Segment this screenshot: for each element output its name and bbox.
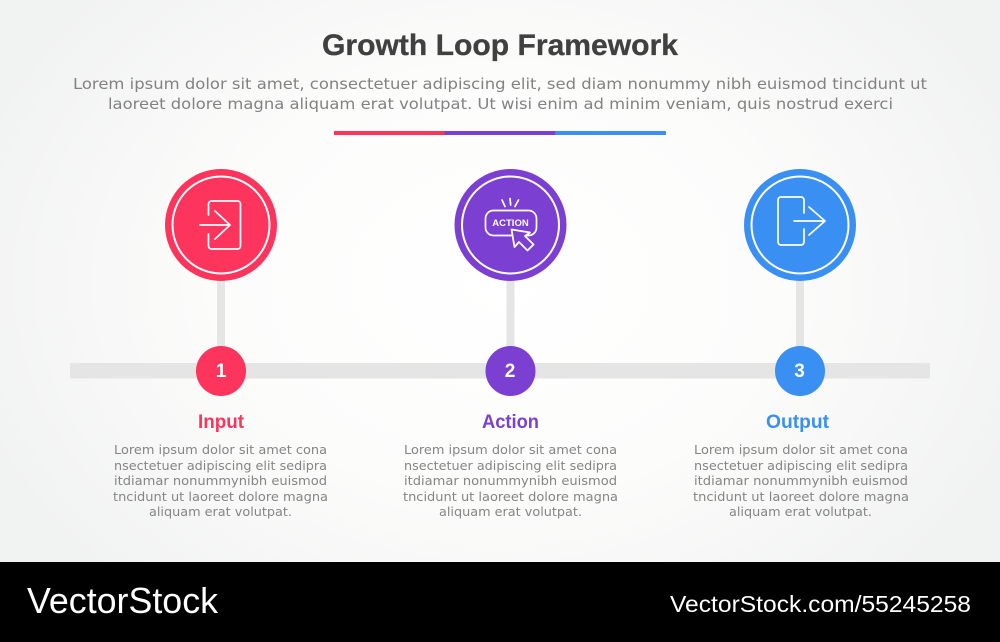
heading: Output: Output (766, 411, 829, 433)
timeline track with stems (70, 280, 930, 378)
panel: step 2 action (403, 169, 618, 519)
description text: tncidunt ut laoreet dolore magna (693, 490, 909, 504)
description text: aliquam erat volutpat. (729, 505, 872, 519)
icon: action button with cursor badge: ACTION (492, 218, 529, 229)
description text: Lorem ipsum dolor sit amet cona (404, 443, 617, 457)
description text (693, 443, 909, 519)
panel: step 3 output (693, 169, 909, 519)
description text: itdiamar nonummynibh euismod (404, 474, 617, 488)
description text: aliquam erat volutpat. (439, 505, 582, 519)
description text: Lorem ipsum dolor sit amet cona (694, 443, 908, 457)
description text (113, 443, 328, 519)
title: Growth Loop Framework (322, 29, 678, 62)
number badge 3 (775, 346, 825, 396)
description text: itdiamar nonummynibh euismod (694, 474, 908, 488)
icon: action button with cursor badge (454, 169, 566, 281)
subtitle text: laoreet dolore magna aliquam erat volutpat. Ut wisi enim ad minim veniam, quis nostrud exerci (108, 95, 893, 113)
description text: nsectetuer adipiscing elit sedipra (114, 459, 327, 473)
heading: Input: Input (198, 411, 244, 433)
number badge 1 (196, 346, 246, 396)
description text: aliquam erat volutpat. (149, 505, 292, 519)
footer image id: VectorStock.com/55245258 (670, 591, 971, 617)
description text: itdiamar nonummynibh euismod (114, 474, 327, 488)
footer logo wordmark: VectorStock (27, 580, 219, 621)
number badge 1: 1 (216, 361, 227, 382)
description text: tncidunt ut laoreet dolore magna (403, 490, 618, 504)
description text: nsectetuer adipiscing elit sedipra (404, 459, 617, 473)
subtitle text: Lorem ipsum dolor sit amet, consectetuer adipiscing elit, sed diam nonummy nibh euismod tincidunt ut (73, 75, 927, 93)
description text: tncidunt ut laoreet dolore magna (113, 490, 328, 504)
subtitle text (73, 75, 927, 113)
heading: Action: Action (482, 411, 539, 433)
description text (403, 443, 618, 519)
description text: Lorem ipsum dolor sit amet cona (114, 443, 327, 457)
number badge 2 (486, 346, 536, 396)
icon: exit arrow badge (744, 169, 856, 281)
footer band (0, 562, 1000, 642)
number badge 2: 2 (505, 361, 515, 382)
tricolor accent divider (334, 131, 666, 135)
icon: enter arrow badge (165, 169, 277, 281)
number badge 3: 3 (794, 361, 805, 382)
description text: nsectetuer adipiscing elit sedipra (694, 459, 908, 473)
panel: step 1 input (113, 169, 328, 519)
